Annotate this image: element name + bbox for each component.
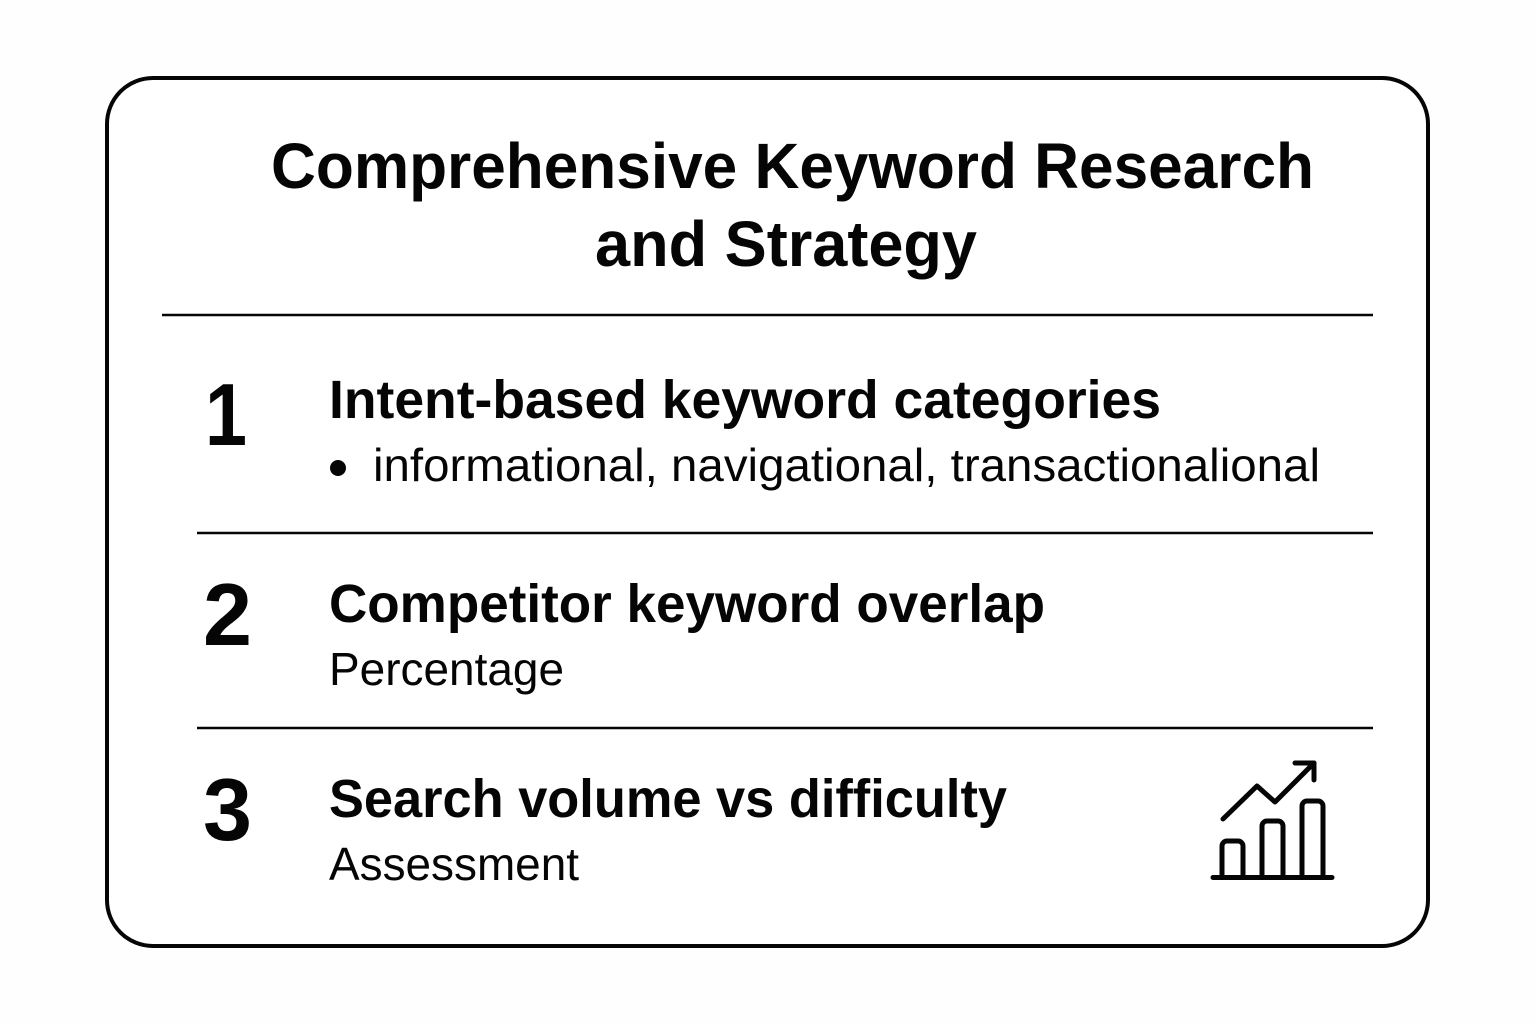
title: Comprehensive Keyword Research <box>271 130 1314 202</box>
number 1: 1 <box>205 365 247 464</box>
heading 3: Search volume vs difficulty <box>329 769 1007 829</box>
item 3: search volume vs difficulty <box>203 760 1007 890</box>
item 2: competitor keyword overlap <box>203 565 1045 695</box>
number 2: 2 <box>203 565 252 664</box>
item 1: intent-based keyword categories <box>205 365 1320 491</box>
description 3: Assessment <box>329 838 579 890</box>
icon: rising bar chart with arrow <box>1213 763 1332 878</box>
number 3: 3 <box>203 760 252 859</box>
panel: main card <box>107 78 1428 946</box>
heading 2: Competitor keyword overlap <box>329 574 1045 634</box>
heading 1: Intent-based keyword categories <box>329 370 1161 430</box>
title <box>271 130 1314 280</box>
title: and Strategy <box>595 208 977 280</box>
description 1: informational, navigational, transactionalional <box>373 439 1320 491</box>
bullet <box>330 460 346 476</box>
description 2: Percentage <box>329 643 564 695</box>
